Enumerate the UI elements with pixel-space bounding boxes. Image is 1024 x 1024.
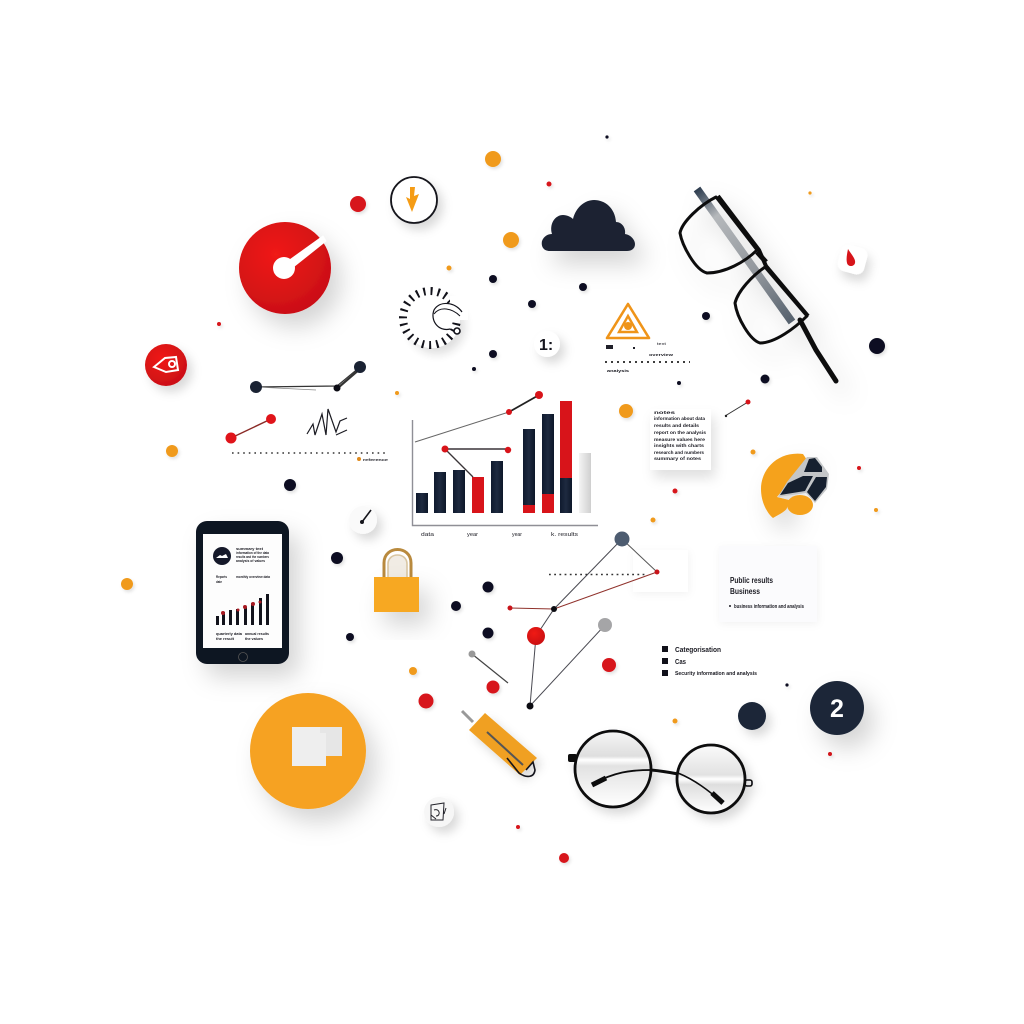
icon: large orange circle with paper: [250, 693, 366, 809]
tablet home button: [238, 652, 248, 662]
axis labels: data: [421, 532, 434, 538]
icon: rectangular glasses: [680, 189, 836, 381]
icon: red drop badge: [836, 243, 869, 276]
axes: [412, 420, 598, 526]
paper note: measure values here: [654, 437, 706, 442]
bars: [416, 401, 591, 513]
tablet text lines: analysis of values: [236, 559, 265, 563]
icon: small doodle badge: [424, 797, 454, 827]
network links: [510, 539, 657, 706]
faint text card: Public results: [730, 576, 773, 585]
icon: warning triangle: [606, 304, 649, 349]
stick connector: [468, 650, 508, 683]
bullet list: Security information and analysis: [675, 671, 757, 677]
axis labels: [421, 532, 579, 538]
tablet bar chart: [216, 594, 269, 625]
icon: red badge: [145, 344, 187, 386]
icon: round glasses: [568, 731, 752, 813]
tablet screen: [203, 534, 282, 648]
paper note: notes: [654, 410, 676, 415]
tablet text lines: summary text: [236, 547, 264, 551]
trend lines: [415, 391, 543, 477]
squiggle sparkline: [307, 409, 347, 435]
paper note: results and details: [654, 423, 700, 428]
small connector with red dot: [725, 400, 750, 417]
tablet text lines: information of the data: [236, 551, 269, 555]
navy dot: [738, 702, 766, 730]
scattered dark dots: [284, 135, 885, 687]
faint text card: business information and analysis: [734, 604, 804, 610]
tablet text lines: results and the numbers: [236, 555, 269, 559]
tablet text lines: Reports: [216, 575, 227, 579]
icon: cloud: [542, 200, 635, 251]
bullet list: Cas: [675, 659, 686, 666]
dotted axis with label: reference: [363, 458, 388, 462]
tablet text lines: quarterly data: [216, 632, 242, 636]
icon: red dial: [239, 222, 331, 314]
axis labels: year: [512, 532, 522, 538]
paper note: report on the analysis: [654, 430, 707, 435]
scattered red dots: [217, 182, 861, 863]
tablet text lines: the result: [216, 637, 235, 641]
network nodes: [508, 532, 660, 710]
faint text card: [719, 546, 817, 622]
tablet text lines: monthly overview data: [236, 575, 270, 579]
caption under warning triangle: overview: [649, 353, 673, 357]
paper note: summary of notes: [654, 456, 702, 461]
bar chart: [412, 391, 598, 538]
navy number badge: 2: [830, 695, 844, 723]
icon: padlock: [374, 550, 419, 612]
icon: small numbered badge: [534, 331, 560, 357]
tablet text lines: annual results: [245, 632, 269, 636]
dotted axis with label: [232, 453, 388, 462]
icon: orange arrow in circle: [391, 177, 437, 223]
tablet text lines: [216, 547, 270, 641]
network diagram: [508, 532, 660, 710]
paper note: insights with charts: [654, 443, 705, 448]
paper note: information about data: [654, 416, 706, 421]
icon: small numbered badge: 1:: [539, 337, 553, 354]
axis labels: year: [467, 532, 478, 538]
tablet: [196, 521, 289, 664]
axis labels: k. results: [551, 532, 579, 538]
icon: orange pen case: [462, 711, 537, 776]
caption under warning triangle: text: [657, 342, 666, 346]
paper note: [650, 409, 711, 470]
caption under warning triangle: analysis: [607, 369, 629, 373]
faint text card: Business: [730, 587, 760, 596]
tablet text lines: date: [216, 580, 222, 584]
connector: red nodes: [226, 414, 276, 444]
connector: dark nodes: [250, 361, 366, 393]
tablet avatar: [213, 547, 231, 565]
navy number badge: [810, 681, 864, 735]
icon: orange pie with dark panels: [761, 454, 829, 518]
icon: gear of ticks: [403, 291, 468, 348]
scattered orange dots: [121, 151, 878, 724]
bullet list: Categorisation: [675, 645, 721, 654]
paper note: research and numbers: [654, 450, 705, 455]
caption under warning triangle: [605, 342, 690, 373]
tablet text lines: the values: [245, 637, 263, 641]
icon: small clock: [349, 506, 377, 534]
faint paper behind network: [633, 550, 688, 592]
bullet list: [662, 645, 757, 677]
